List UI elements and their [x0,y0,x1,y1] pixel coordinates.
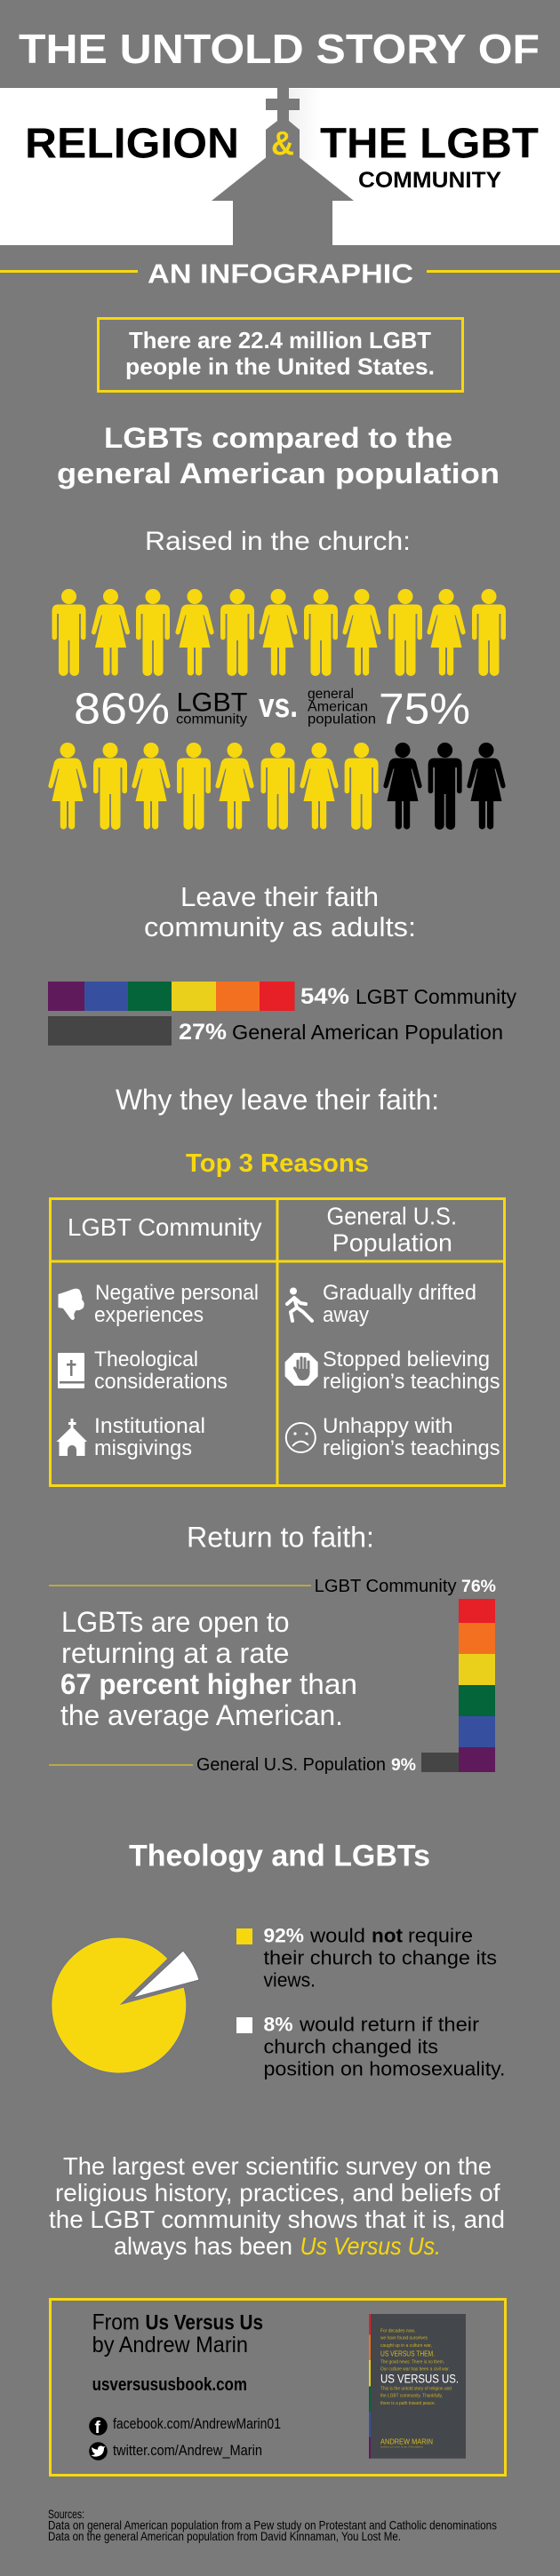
heading: the lgbt: THE LGBT [320,121,539,167]
text: sources: Sources: [48,2507,84,2521]
legend: 8 percent: position on homosexuality. [263,2058,505,2080]
reason: theological: Theological [94,1348,198,1371]
callout: 22.4 million: people in the United States. [125,354,435,380]
stat: 86 vs 75: vs. [259,688,298,725]
book cover: there is a path toward peace. [380,2401,436,2406]
legend: 8 percent: 8% [263,2014,293,2036]
reason: institutional: misgivings [94,1436,192,1460]
book cover [369,2314,466,2459]
stat: 86 vs 75: community [176,712,247,727]
panel: book promo [50,2299,505,2475]
legend: 92 percent: their church to change its [263,1947,497,1969]
legend: 92 percent [236,1925,497,1992]
icon: thumbs down [59,1289,84,1320]
label: lgbt 76 percent: LGBT Community [315,1577,457,1596]
reason: unhappy: religion’s teachings [323,1436,500,1460]
stat: 86 vs 75: LGBT [176,688,247,718]
bar: lgbt rainbow [459,1599,495,1772]
heading: community: COMMUNITY [358,168,501,193]
table: top reasons [50,1198,505,1486]
label: lgbt community: LGBT Community [356,985,516,1008]
legend: 92 percent: 92% [263,1925,304,1947]
reason: institutional: Institutional [94,1414,205,1438]
title: the untold story of: THE UNTOLD STORY OF [19,26,540,72]
column heading: general [327,1203,457,1257]
bar: lgbt 54 percent [48,982,295,1011]
icon: facebook: f [94,2419,101,2437]
label: 54 percent: 54% [300,984,349,1009]
text: open to returning: 67 percent higher [60,1668,292,1700]
title banner [0,88,560,245]
stat: 86 vs 75: population [308,712,376,727]
reason: drifted away: away [323,1303,369,1327]
banner shade [289,89,320,160]
text: from us versus us: by Andrew Marin [92,2333,248,2357]
stat: 86 vs 75: general [308,687,354,702]
icon: bible [58,1353,84,1388]
ampersand: & [271,125,294,163]
legend: 8 percent [236,2014,505,2080]
reason: theological: considerations [94,1370,228,1394]
book cover: author of Love Is an Orientation [380,2446,424,2448]
heading: comparison: LGBTs compared to the [104,422,452,454]
stat: 86 vs 75: 75% [379,686,470,734]
subtitle: an infographic [0,258,560,290]
reason: negative experiences: Negative personal [95,1281,259,1305]
legend: 92 percent: require [408,1925,473,1947]
column heading: lgbt: LGBT Community [68,1213,261,1241]
legend: 92 percent: would [309,1925,365,1947]
icon: facebook [89,2417,108,2437]
book cover: caught up in a culture war, [380,2343,432,2349]
text: conclusion: the LGBT community shows that it is, and [49,2206,505,2233]
bar chart: leaving faith [48,982,516,1046]
stat: 86 vs 75 [74,686,470,734]
text: from us versus us: From [92,2310,140,2335]
label: 27 percent: 27% [179,1020,227,1045]
legend: 8 percent: church changed its [263,2036,438,2058]
text: twitter link: twitter.com/Andrew_Marin [113,2442,262,2459]
text: conclusion: The largest ever scientific survey on the [63,2152,492,2180]
callout: 22.4 million: There are 22.4 million LGBT [129,327,431,354]
legend: 92 percent: not [372,1925,404,1947]
heading: religion: RELIGION [25,121,239,167]
slice: 8 percent [133,1951,199,1998]
icon: walking person [287,1288,312,1321]
book cover: For decades now, [380,2329,415,2334]
text: facebook link: facebook.com/AndrewMarin01 [113,2415,281,2432]
legend: 8 percent: would return if their [299,2014,479,2036]
book cover: Our culture war has been a civil war. [380,2367,450,2373]
text: from us versus us [92,2310,263,2357]
heading: why they leave: Why they leave their faith: [116,1084,439,1116]
text: sources [48,2507,497,2543]
slice: 92 percent [52,1937,187,2073]
reason: institutional [94,1414,205,1460]
heading: leave their faith: community as adults: [144,911,416,942]
reason: negative experiences: experiences [94,1303,204,1327]
white banner [0,88,560,245]
reason: drifted away [323,1281,476,1327]
text: from us versus us: Us Versus Us [146,2311,263,2335]
label: general american population: General American Population [232,1021,503,1044]
pie chart [52,1937,199,2073]
pictogram: 86 percent [52,589,506,676]
text: website: usversususbook.com [92,2375,247,2395]
text: sources: Data on the general American population from David Kinnaman, You Lost Me. [48,2529,401,2543]
pictogram: 75 percent [48,743,506,830]
book cover: we have found ourselves [380,2336,428,2341]
label: lgbt 76 percent: 76% [461,1578,496,1596]
reason: negative experiences [94,1281,259,1327]
label: general 9 percent: General U.S. Population [196,1755,386,1775]
heading: leave their faith [144,881,416,942]
bar: general 27 percent [48,1016,172,1046]
book cover: ANDREW MARIN [380,2437,433,2446]
heading: leave their faith: Leave their faith [180,881,379,912]
subtitle: an infographic: AN INFOGRAPHIC [148,258,413,290]
bar: general [421,1753,459,1772]
reason: stopped believing: Stopped believing [323,1348,490,1371]
text: conclusion [49,2152,505,2260]
icon: church silhouette [212,88,354,245]
book cover: US VERSUS THEM. [380,2349,435,2358]
stat: 86 vs 75: 86% [74,686,170,734]
heading: raised in the church: Raised in the church: [145,527,411,556]
reason: stopped believing: religion’s teachings [323,1370,500,1394]
icon: stop hand [285,1353,318,1386]
text: conclusion: religious history, practices, and beliefs of [55,2179,500,2206]
heading: theology and lgbts: Theology and LGBTs [129,1840,430,1873]
heading: top 3 reasons: Top 3 Reasons [186,1149,369,1178]
text: open to returning: LGBTs are open to [61,1606,290,1638]
label: general 9 percent: 9% [391,1756,416,1775]
heading: comparison [57,422,500,489]
reason: stopped believing [323,1348,500,1394]
text: open to returning: returning at a rate [61,1637,290,1669]
text: conclusion: always has been [114,2232,292,2260]
icon: sad face [286,1423,316,1452]
stat: 86 vs 75: American [308,700,368,714]
book cover: US VERSUS US. [380,2372,459,2386]
text: open to returning [60,1606,357,1731]
text: conclusion: Us Versus Us. [300,2232,441,2260]
heading: comparison: general American population [57,457,500,489]
book cover: This is the untold story of religion and [380,2387,452,2392]
reason: drifted away: Gradually drifted [323,1281,476,1305]
chart: return to faith [49,1577,496,1775]
reason: unhappy: Unhappy with [323,1414,453,1438]
icon: twitter [89,2442,108,2461]
text: open to returning: than [300,1668,357,1700]
text: open to returning: the average American. [60,1699,343,1731]
book cover: The good news: There is no them. [380,2360,444,2365]
label: lgbt 76 percent [49,1577,496,1596]
column heading: general: General U.S. [327,1203,457,1230]
legend: 92 percent: views. [263,1969,316,1992]
callout: 22.4 million [98,318,462,391]
column heading: general: Population [332,1229,452,1257]
book cover: the LGBT community. Thankfully, [380,2394,443,2399]
reason: unhappy [323,1414,500,1460]
label: general 9 percent [49,1755,416,1775]
icon: small church [57,1419,87,1456]
heading: return to faith: Return to faith: [187,1522,374,1554]
reason: theological [94,1348,228,1394]
